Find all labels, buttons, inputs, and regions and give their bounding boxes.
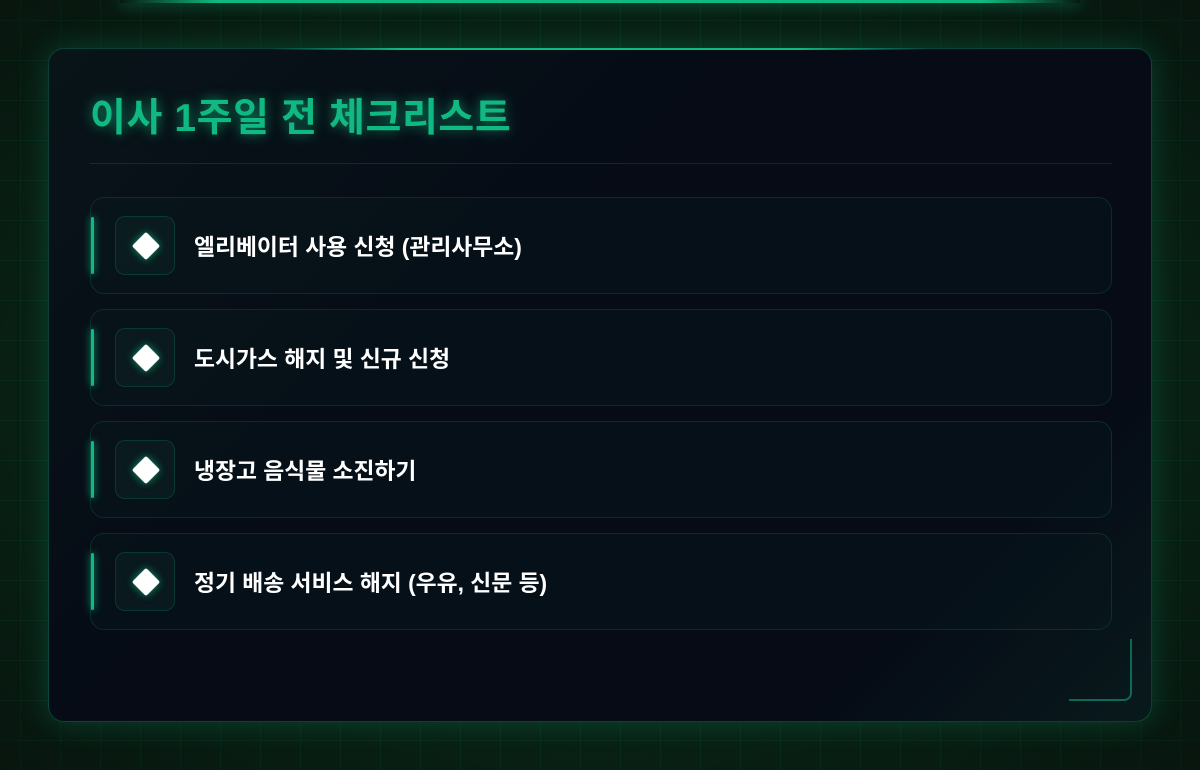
icon: diamond: [115, 328, 175, 387]
icon: diamond: [115, 552, 175, 611]
item 1: [90, 197, 1112, 294]
text: 냉장고 음식물 소진하기: [194, 458, 416, 484]
corner bracket: [1069, 639, 1132, 701]
icon: diamond: [115, 216, 175, 275]
text: 도시가스 해지 및 신규 신청: [194, 346, 450, 372]
text: 정기 배송 서비스 해지 (우유, 신문 등): [194, 570, 547, 596]
title: 이사 1주일 전 체크리스트: [90, 97, 511, 140]
item 2: [90, 309, 1112, 406]
item 3: [90, 421, 1112, 518]
text: 엘리베이터 사용 신청 (관리사무소): [194, 234, 522, 260]
icon: diamond: [115, 440, 175, 499]
item 4: [90, 533, 1112, 630]
